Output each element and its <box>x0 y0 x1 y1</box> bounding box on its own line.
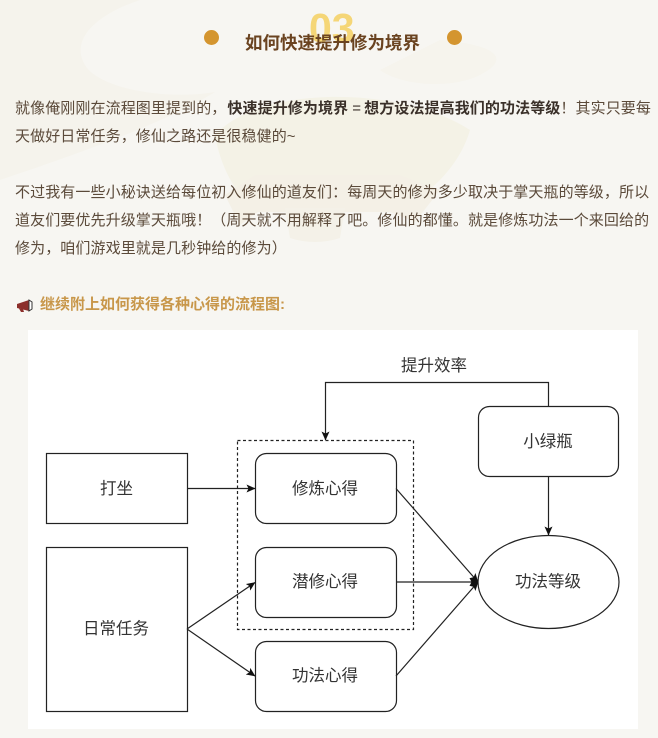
arrow: 修炼心得 to 功法等级 <box>396 488 478 582</box>
icon: megaphone <box>17 299 32 312</box>
label: 提升效率: 提升效率 <box>401 356 467 375</box>
arrow: 打坐 to 修炼心得 <box>187 488 255 490</box>
node: 修炼心得: 修炼心得 <box>292 479 358 498</box>
text block: paragraph 1 <box>15 100 651 145</box>
node: 功法心得: 功法心得 <box>292 666 358 685</box>
node: 功法等级 <box>478 536 619 628</box>
arrow: 小绿瓶 to 功法等级 <box>548 476 550 535</box>
subheading: 继续附上如何获得各种心得的流程图: <box>40 296 285 313</box>
node: 日常任务 <box>46 548 188 712</box>
node: 功法等级: 功法等级 <box>515 572 581 591</box>
dashed group box <box>238 440 414 630</box>
background: cauldron watermark <box>216 97 470 242</box>
node: 小绿瓶 <box>478 406 618 476</box>
node: 修炼心得 <box>256 454 396 524</box>
heading decoration: right dot <box>447 30 462 45</box>
heading decoration: left dot <box>204 30 219 45</box>
heading: 如何快速提升修为境界 <box>245 33 420 53</box>
arrow: 小绿瓶 feedback to group <box>326 382 548 440</box>
node: 功法心得 <box>256 642 396 712</box>
section number 03: 03 <box>309 5 355 51</box>
node: 小绿瓶: 小绿瓶 <box>523 432 573 451</box>
arrow: 日常任务 to 功法心得 <box>187 629 255 676</box>
arrow: 潜修心得 to 功法等级 <box>396 581 478 583</box>
text block: paragraph 2: 道友们要优先升级掌天瓶哦！（周天就不用解释了吧。修仙的都懂。就是修炼功法一个来回给的 <box>15 212 649 229</box>
text block: paragraph 2: 不过我有一些小秘诀送给每位初入修仙的道友们：每周天的修为多少取决于掌天瓶的等级，所以 <box>15 184 649 201</box>
node: 潜修心得 <box>256 548 396 618</box>
node: 潜修心得: 潜修心得 <box>292 572 358 591</box>
text block: paragraph 1: 就像俺刚刚在流程图里提到的，快速提升修为境界 =想方设法提高我们的功法等级！其实只要每 <box>15 100 651 117</box>
node: 打坐 <box>46 454 188 524</box>
arrow: 日常任务 to 潜修心得 <box>187 582 255 629</box>
node: 日常任务: 日常任务 <box>83 619 149 638</box>
node: 打坐: 打坐 <box>100 479 133 498</box>
text block: paragraph 2 <box>15 184 649 257</box>
text block: paragraph 1: 天做好日常任务，修仙之路还是很稳健的~ <box>15 128 296 145</box>
arrow: 功法心得 to 功法等级 <box>396 582 478 676</box>
text block: paragraph 2: 修为，咱们游戏里就是几秒钟给的修为） <box>15 240 287 257</box>
